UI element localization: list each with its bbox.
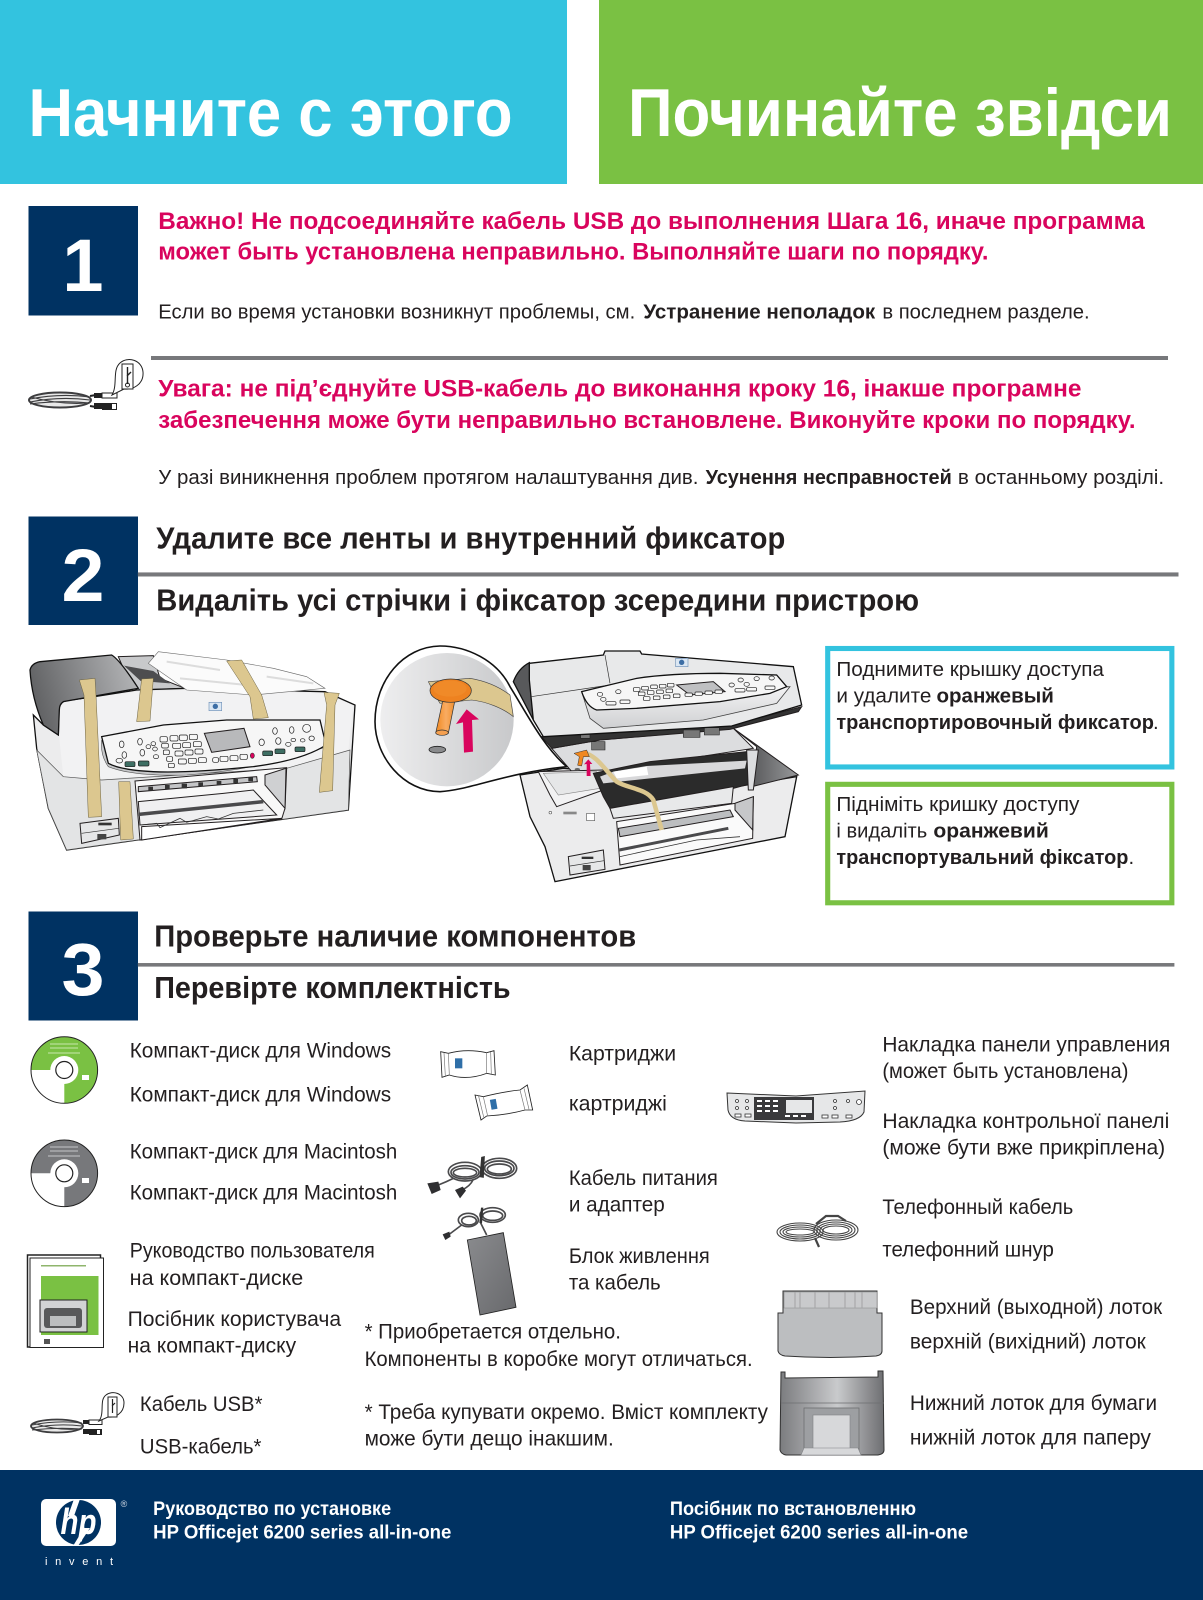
- icon: Windows CD: [31, 1037, 98, 1103]
- left column labels: Кабель USB*: [140, 1392, 262, 1416]
- step 3 number badge: 3: [62, 928, 104, 1011]
- right column labels: нижній лоток для паперу: [910, 1426, 1151, 1450]
- footer Ukrainian title: HP Officejet 6200 series all-in-one: [670, 1521, 968, 1543]
- right column labels: (може бути вже прикріплена): [882, 1136, 1165, 1160]
- HP invent logo: [41, 1499, 128, 1568]
- step 3 headings: Проверьте наличие компонентов: [154, 920, 636, 954]
- step 2 headings: Видаліть усі стрічки і фіксатор зсередини пристрою: [156, 584, 919, 618]
- left column labels: на компакт-диске: [130, 1266, 303, 1290]
- left column labels: Компакт-диск для Macintosh: [130, 1180, 397, 1204]
- footnote Russian: * Приобретается отдельно.: [365, 1319, 621, 1343]
- icon: Macintosh CD: [31, 1140, 98, 1207]
- middle column labels: та кабель: [569, 1270, 661, 1294]
- step 2 headings: [138, 521, 1178, 618]
- footer Ukrainian title: Посібник по встановленню: [670, 1498, 916, 1520]
- divider rule step 1: [151, 356, 1168, 360]
- step 1 Russian warning: Важно! Не подсоединяйте кабель USB до выполнения Шага 16, иначе программа: [158, 208, 1145, 235]
- icon: power cord: [427, 1157, 517, 1198]
- step 2 number badge: 2: [62, 534, 104, 617]
- Ukrainian warning: [158, 375, 1136, 434]
- middle column labels: и адаптер: [569, 1193, 665, 1217]
- right column labels: телефонний шнур: [882, 1238, 1054, 1262]
- HP invent logo: hp: [60, 1501, 96, 1542]
- header: Ukrainian title banner: [599, 0, 1203, 184]
- footer Russian title: [153, 1498, 452, 1543]
- middle column labels: Блок живлення: [569, 1244, 710, 1268]
- callout: Ukrainian instruction box: Підніміть кришку доступу: [836, 794, 1080, 816]
- step 1 Russian note: Если во время установки возникнут проблемы, см.: [158, 302, 635, 324]
- footnote Ukrainian: може бути дещо інакшим.: [365, 1427, 614, 1451]
- illustration: taped printer: [30, 652, 355, 850]
- left column labels: [128, 1039, 397, 1459]
- step 1 number badge: [28, 206, 138, 316]
- footer band: [0, 1470, 1203, 1600]
- Ukrainian warning: забезпечення може бути неправильно встановлене. Виконуйте кроки по порядку.: [158, 407, 1136, 434]
- step 1 Russian note: [158, 302, 1090, 324]
- callout: Russian instruction box: и удалите: [836, 686, 931, 708]
- right column labels: Накладка контрольної панелі: [882, 1109, 1169, 1133]
- left column labels: Компакт-диск для Windows: [130, 1082, 391, 1106]
- callout: Ukrainian instruction box: і видаліть: [836, 820, 927, 842]
- footer Russian title: Руководство по установке: [153, 1498, 391, 1520]
- right column labels: Верхний (выходной) лоток: [910, 1295, 1163, 1319]
- icon: power adapter: [443, 1208, 516, 1315]
- illustration: opened printer with magnified fixator callout: [375, 646, 802, 882]
- callout: Russian instruction box: .: [1153, 712, 1159, 734]
- footnote Ukrainian: * Треба купувати окремо. Вміст комплекту: [365, 1400, 768, 1424]
- step 3 headings: Перевірте комплектність: [154, 971, 511, 1005]
- right column labels: [882, 1032, 1170, 1450]
- step 1 Russian warning: может быть установлена неправильно. Выполняйте шаги по порядку.: [158, 238, 989, 265]
- HP invent logo: invent: [45, 1556, 113, 1568]
- callout: Russian instruction box: [828, 648, 1172, 767]
- middle column labels: Кабель питания: [569, 1166, 718, 1190]
- icon: bottom paper tray: [780, 1371, 884, 1455]
- step 3 number badge: [28, 912, 138, 1020]
- icon: USB cable item: [31, 1393, 124, 1435]
- callout: Russian instruction box: Поднимите крышку доступа: [836, 659, 1105, 681]
- icon: USB cable with callout: [29, 360, 143, 410]
- Ukrainian note: У разі виникнення проблем протягом налаштування див.: [158, 467, 699, 489]
- middle column labels: картриджі: [569, 1092, 667, 1116]
- right column labels: Телефонный кабель: [882, 1195, 1073, 1219]
- left column labels: на компакт-диску: [128, 1334, 296, 1358]
- header: Russian title banner: Начните с этого: [28, 75, 512, 151]
- Ukrainian note: [158, 467, 1164, 489]
- middle column labels: Картриджи: [569, 1042, 676, 1066]
- callout: Russian instruction box: транспортировочный фиксатор: [836, 712, 1154, 734]
- callout: Ukrainian instruction box: транспортувальний фіксатор: [836, 847, 1128, 869]
- right column labels: верхній (вихідний) лоток: [910, 1330, 1146, 1354]
- callout: Ukrainian instruction box: .: [1128, 847, 1134, 869]
- step 1 Russian warning: [158, 208, 1145, 265]
- header: Russian title banner: [0, 0, 567, 184]
- step 1 Russian note: Устранение неполадок: [643, 302, 876, 324]
- step 1 number badge: 1: [62, 224, 104, 307]
- footer Ukrainian title: [670, 1498, 968, 1543]
- callout: Ukrainian instruction box: оранжевий: [933, 820, 1049, 842]
- callout: Ukrainian instruction box: [828, 784, 1172, 903]
- right column labels: Накладка панели управления: [882, 1032, 1170, 1056]
- middle column labels: [569, 1042, 718, 1294]
- footer Russian title: HP Officejet 6200 series all-in-one: [153, 1521, 452, 1543]
- callout: Russian instruction box: оранжевый: [936, 686, 1054, 708]
- Ukrainian note: в останньому розділі.: [958, 467, 1164, 489]
- icon: user guide booklet: [28, 1255, 104, 1348]
- step 2 number badge: [28, 516, 138, 625]
- step 1 Russian note: в последнем разделе.: [882, 302, 1090, 324]
- icon: control panel overlay: [727, 1091, 865, 1123]
- step 3 headings: [138, 920, 1174, 1005]
- footnote Russian: [365, 1319, 753, 1371]
- HP invent logo: ®: [121, 1499, 128, 1509]
- left column labels: Посібник користувача: [128, 1307, 341, 1331]
- footnote Russian: Компоненты в коробке могут отличаться.: [365, 1347, 753, 1371]
- left column labels: USB-кабель*: [140, 1435, 261, 1459]
- icon: top output tray: [778, 1291, 882, 1358]
- Ukrainian warning: Увага: не під’єднуйте USB-кабель до виконання кроку 16, інакше програмне: [158, 375, 1081, 402]
- right column labels: Нижний лоток для бумаги: [910, 1391, 1157, 1415]
- icon: print cartridges: [441, 1051, 533, 1120]
- right column labels: (может быть установлена): [882, 1059, 1128, 1083]
- left column labels: Компакт-диск для Macintosh: [130, 1140, 397, 1164]
- icon: phone cord: [777, 1216, 858, 1247]
- Ukrainian note: Усунення несправностей: [706, 467, 952, 489]
- step 2 headings: Удалите все ленты и внутренний фиксатор: [156, 521, 785, 555]
- left column labels: Компакт-диск для Windows: [130, 1039, 391, 1063]
- footnote Ukrainian: [365, 1400, 768, 1451]
- left column labels: Руководство пользователя: [130, 1239, 375, 1263]
